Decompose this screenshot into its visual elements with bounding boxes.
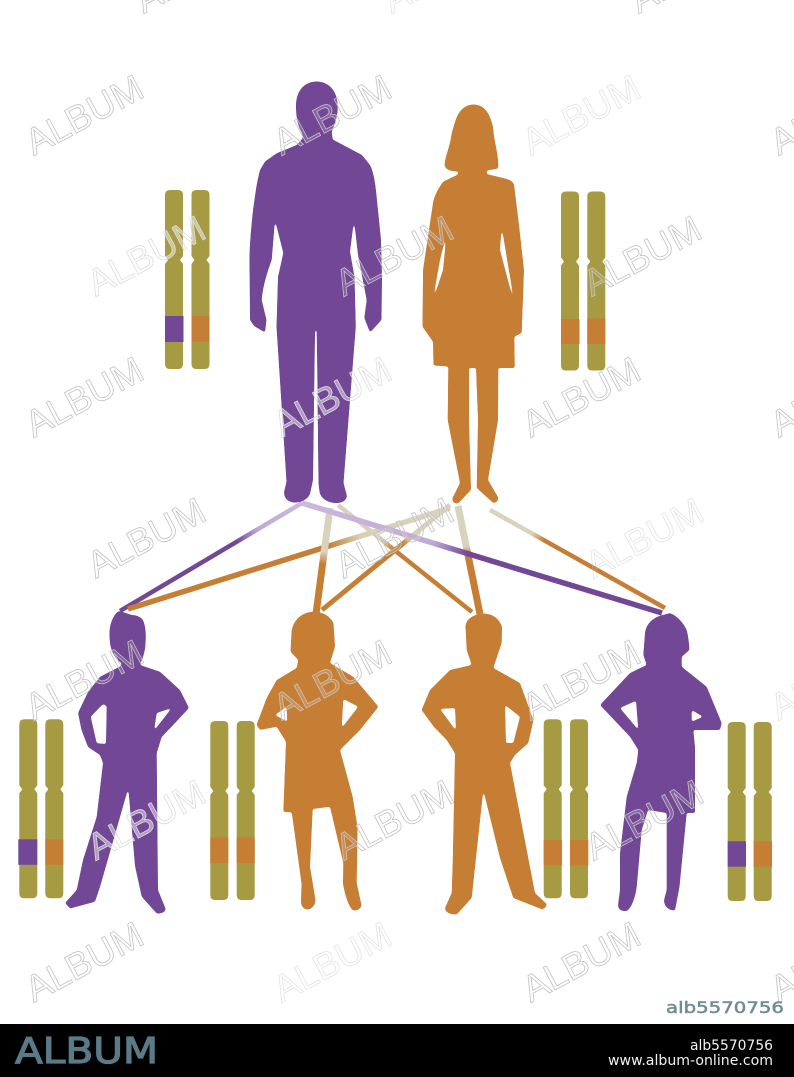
watermark pattern: ALBUM <box>578 490 710 586</box>
watermark pattern: ALBUM <box>80 772 212 868</box>
watermark pattern: ALBUM <box>18 349 150 445</box>
watermark pattern: ALBUM <box>266 67 398 163</box>
line: father to child 2 <box>316 508 330 614</box>
watermark pattern: ALBUM <box>328 490 460 586</box>
child 1 silhouette <box>65 611 189 914</box>
chromosome with orange band <box>544 719 562 898</box>
watermark pattern: ALBUM <box>515 632 647 728</box>
watermark pattern: ALBUM <box>80 490 212 586</box>
chromosome with orange band <box>570 719 588 898</box>
watermark pattern: ALBUM <box>18 67 150 163</box>
chromosome with orange band <box>561 192 580 370</box>
chromosome with purple band <box>18 719 37 898</box>
line: mother to child 2 <box>322 505 450 610</box>
watermark pattern: ALBUM <box>266 914 398 1010</box>
footer image id: alb5570756 <box>690 1038 773 1054</box>
father silhouette <box>250 82 382 503</box>
watermark pattern: ALBUM <box>578 772 710 868</box>
child 4 chromosome pair <box>728 722 772 901</box>
chromosome with purple band <box>728 722 746 901</box>
inheritance lines from parents to children <box>120 503 665 614</box>
chromosome with orange band <box>587 192 605 370</box>
watermark pattern: ALBUM <box>515 67 647 163</box>
line: father to child 4 <box>302 503 662 613</box>
chromosome with purple band <box>165 190 184 369</box>
child 4 silhouette <box>600 613 722 911</box>
watermark pattern: ALBUM <box>266 349 398 445</box>
child 3 silhouette <box>422 614 547 914</box>
line: father to child 1 <box>120 503 302 611</box>
footer logo: ALBUM <box>15 1031 158 1072</box>
child 3 chromosome pair <box>544 719 588 898</box>
watermark pattern: ALBUM <box>18 632 150 728</box>
watermark pattern: ALBUM <box>515 914 647 1010</box>
chromosome with orange band <box>237 721 255 900</box>
watermark pattern: ALBUM <box>80 208 212 304</box>
chromosome with orange band <box>210 721 228 900</box>
child 1 chromosome pair <box>18 719 63 898</box>
watermark pattern: ALBUM <box>328 208 460 304</box>
line: father to child 3 <box>338 505 472 612</box>
line: mother to child 1 <box>128 508 450 609</box>
line: mother to child 3 <box>458 506 480 614</box>
child 2 chromosome pair <box>210 721 255 900</box>
mother silhouette <box>422 104 524 504</box>
watermark pattern: ALBUM <box>266 632 398 728</box>
footer bar <box>0 1024 794 1077</box>
chromosome with orange band <box>754 722 772 901</box>
chromosome with orange band <box>192 190 210 369</box>
watermark pattern: ALBUM <box>328 772 460 868</box>
watermark pattern: ALBUM <box>515 349 647 445</box>
mother's chromosome pair <box>561 192 605 370</box>
watermark pattern: ALBUM <box>18 914 150 1010</box>
chromosome with orange band <box>45 719 63 898</box>
child 2 silhouette <box>256 612 378 911</box>
father's chromosome pair <box>165 190 210 369</box>
image id above footer: alb5570756 <box>666 998 784 1017</box>
watermark pattern: ALBUM <box>576 208 708 304</box>
footer website: www.album-online.com <box>608 1053 773 1069</box>
line: mother to child 4 <box>490 510 665 608</box>
